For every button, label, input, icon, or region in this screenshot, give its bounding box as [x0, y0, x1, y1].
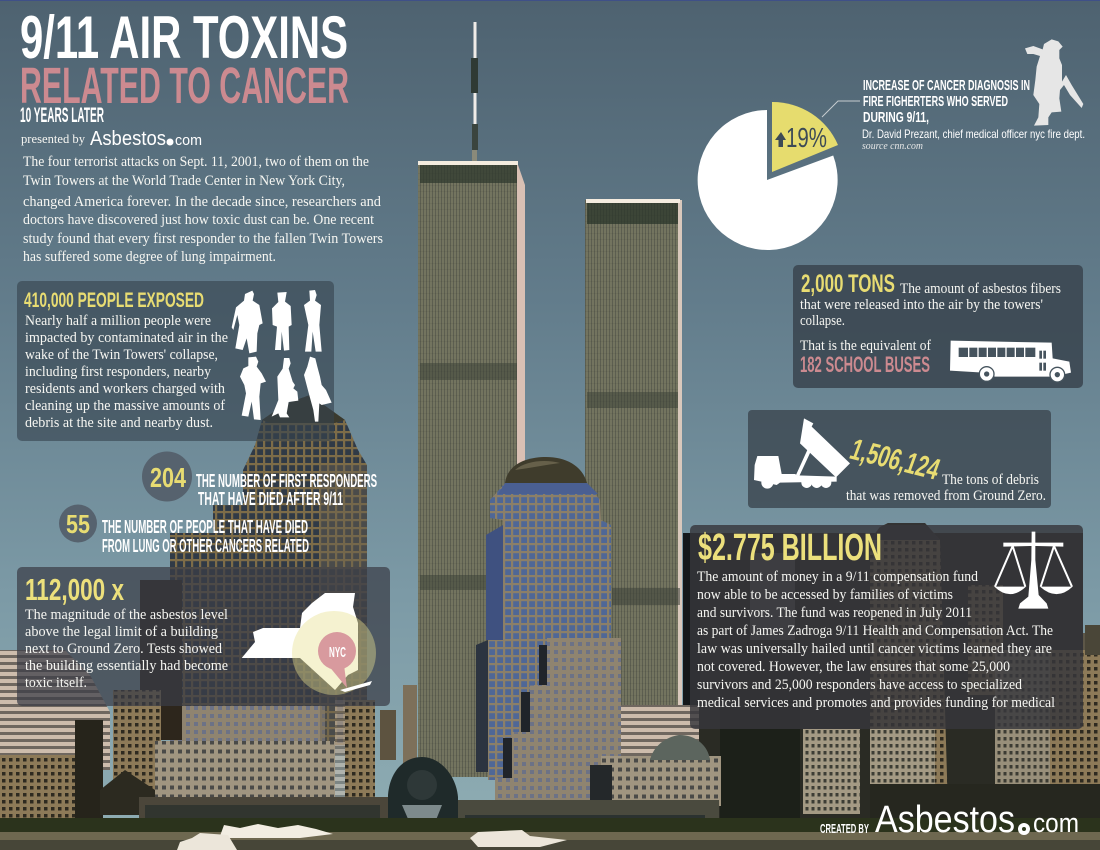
panel: 1,506,124 tons of debris	[748, 410, 1051, 508]
presented by logo: Asbestos	[90, 128, 166, 150]
panel text: debris at the site and nearby dust.	[25, 415, 213, 431]
panel text: law was universally hailed until cancer victims learned they are	[697, 641, 1052, 657]
icon: dump truck	[754, 418, 850, 489]
rotated figure: 1,506,124	[846, 434, 944, 486]
panel text: The amount of asbestos fibers	[900, 281, 1061, 297]
panel text: now able to be accessed by families of victims	[697, 587, 953, 603]
icon: people silhouettes	[232, 290, 332, 422]
stat: 55 cancer deaths: THE NUMBER OF PEOPLE THAT HAVE DIED	[102, 517, 308, 537]
panel text: and survivors. The fund was reopened in July 2011	[697, 605, 972, 621]
pie value: 19%	[786, 122, 827, 153]
panel text	[800, 281, 1061, 354]
presented by logo	[21, 128, 202, 150]
background photo: south tower	[585, 199, 682, 710]
panel text	[697, 569, 1055, 711]
heading: 9/11 Air Toxins: 9/11 AIR TOXINS	[20, 4, 348, 71]
panel text: above the legal limit of a building	[25, 624, 218, 640]
panel: 112,000 x asbestos level	[17, 567, 390, 706]
panel heading: 112,000 x	[25, 572, 125, 607]
heading: Related to Cancer: RELATED TO CANCER	[20, 57, 349, 114]
presented by logo: presented by	[21, 131, 85, 146]
panel heading: $2.775 BILLION	[698, 527, 882, 569]
panel heading: 410,000 PEOPLE EXPOSED	[24, 289, 204, 312]
callout leader line	[822, 101, 860, 117]
title block	[20, 4, 349, 150]
panel text: The tons of debris	[942, 472, 1039, 488]
panel text: that was removed from Ground Zero.	[846, 488, 1046, 504]
icon: up arrow	[775, 132, 786, 147]
background photo: waterfront and boats	[0, 818, 1100, 850]
footer: created by Asbestos.com: Asbestos	[875, 799, 1015, 841]
map: New York state with NYC marker	[242, 593, 376, 695]
intro paragraph: doctors have discovered just how toxic dust can be. One recent	[23, 212, 374, 228]
intro paragraph: The four terrorist attacks on Sept. 11, 2001, two of them on the	[23, 154, 369, 170]
background photo: left skyline	[0, 395, 417, 833]
firefighter callout text: DURING 9/11,	[863, 109, 929, 126]
panel: 2,000 tons of asbestos	[793, 265, 1083, 388]
panel text	[846, 472, 1046, 504]
panel text: impacted by contaminated air in the	[25, 330, 228, 346]
intro paragraph: study found that every first responder to the fallen Twin Towers	[23, 231, 383, 247]
panel text: residents and workers charged with	[25, 381, 226, 397]
panel text: toxic itself.	[25, 675, 87, 691]
firefighter callout text: FIRE FIGHERTERS WHO SERVED	[863, 93, 1008, 110]
intro paragraph	[23, 154, 383, 265]
title block: 10 YEARS LATER	[20, 104, 104, 127]
intro paragraph: changed America forever. In the decade since, researchers and	[23, 194, 382, 210]
background photo: north tower and antenna	[418, 22, 525, 780]
panel text: That is the equivalent of	[800, 338, 931, 354]
firefighter callout text	[862, 77, 1085, 152]
footer: created by Asbestos.com: com	[1033, 808, 1079, 838]
stat: 55 cancer deaths: 55	[66, 509, 90, 539]
panel text: not covered. However, the law ensures that some 25,000	[697, 659, 1010, 675]
panel text: collapse.	[800, 313, 845, 329]
panel text: Nearly half a million people were	[25, 313, 211, 329]
presented by logo: com	[175, 132, 202, 149]
footer: created by Asbestos.com: CREATED BY	[820, 821, 869, 836]
panel text: The amount of money in a 9/11 compensation fund	[697, 569, 979, 585]
intro paragraph: has suffered some degree of lung impairment.	[23, 249, 276, 265]
pie chart: 19% increase	[698, 102, 838, 250]
panel text: The magnitude of the asbestos level	[25, 607, 228, 623]
panel text: next to Ground Zero. Tests showed	[25, 641, 223, 657]
panel text: as part of James Zadroga 9/11 Health and Compensation Act. The	[697, 623, 1053, 639]
intro paragraph: Twin Towers at the World Trade Center in New York City,	[23, 173, 345, 189]
panel text: the building essentially had become	[25, 658, 228, 674]
stat: 204 first responders	[142, 452, 377, 509]
panel text: medical services and promotes and provides funding for medical	[697, 695, 1055, 711]
stat: 204 first responders: THE NUMBER OF FIRST RESPONDERS	[196, 471, 377, 491]
stat: 55 cancer deaths: FROM LUNG OR OTHER CANCERS RELATED	[102, 536, 309, 556]
panel text: cleaning up the massive amounts of	[25, 398, 225, 414]
panel text: survivors and 25,000 responders have access to specialized	[697, 677, 1023, 693]
background photo: domed central tower	[388, 457, 721, 835]
panel text: including first responders, nearby	[25, 364, 212, 380]
background photo: right skyline	[683, 523, 1100, 820]
firefighter callout text: source cnn.com	[862, 141, 923, 152]
bus comparison figure: 182 SCHOOL BUSES	[800, 352, 930, 377]
panel text: wake of the Twin Towers' collapse,	[25, 347, 218, 363]
panel heading: 2,000 TONS	[801, 270, 895, 298]
panel: $2.775 billion compensation fund	[690, 525, 1083, 729]
panel: 410,000 people exposed	[17, 281, 334, 441]
icon: firefighter silhouette	[1025, 39, 1083, 126]
icon: scales of justice	[994, 532, 1073, 609]
stat: 55 cancer deaths	[59, 504, 309, 556]
stat: 204 first responders: THAT HAVE DIED AFTER 9/11	[198, 489, 343, 509]
map: New York state with NYC marker: NYC	[329, 644, 346, 661]
footer: created by Asbestos.com	[820, 799, 1079, 841]
panel text	[25, 607, 228, 691]
icon: school bus	[950, 341, 1071, 382]
panel text	[25, 313, 228, 431]
panel text: that were released into the air by the towers'	[800, 297, 1043, 313]
stat: 204 first responders: 204	[150, 462, 186, 493]
